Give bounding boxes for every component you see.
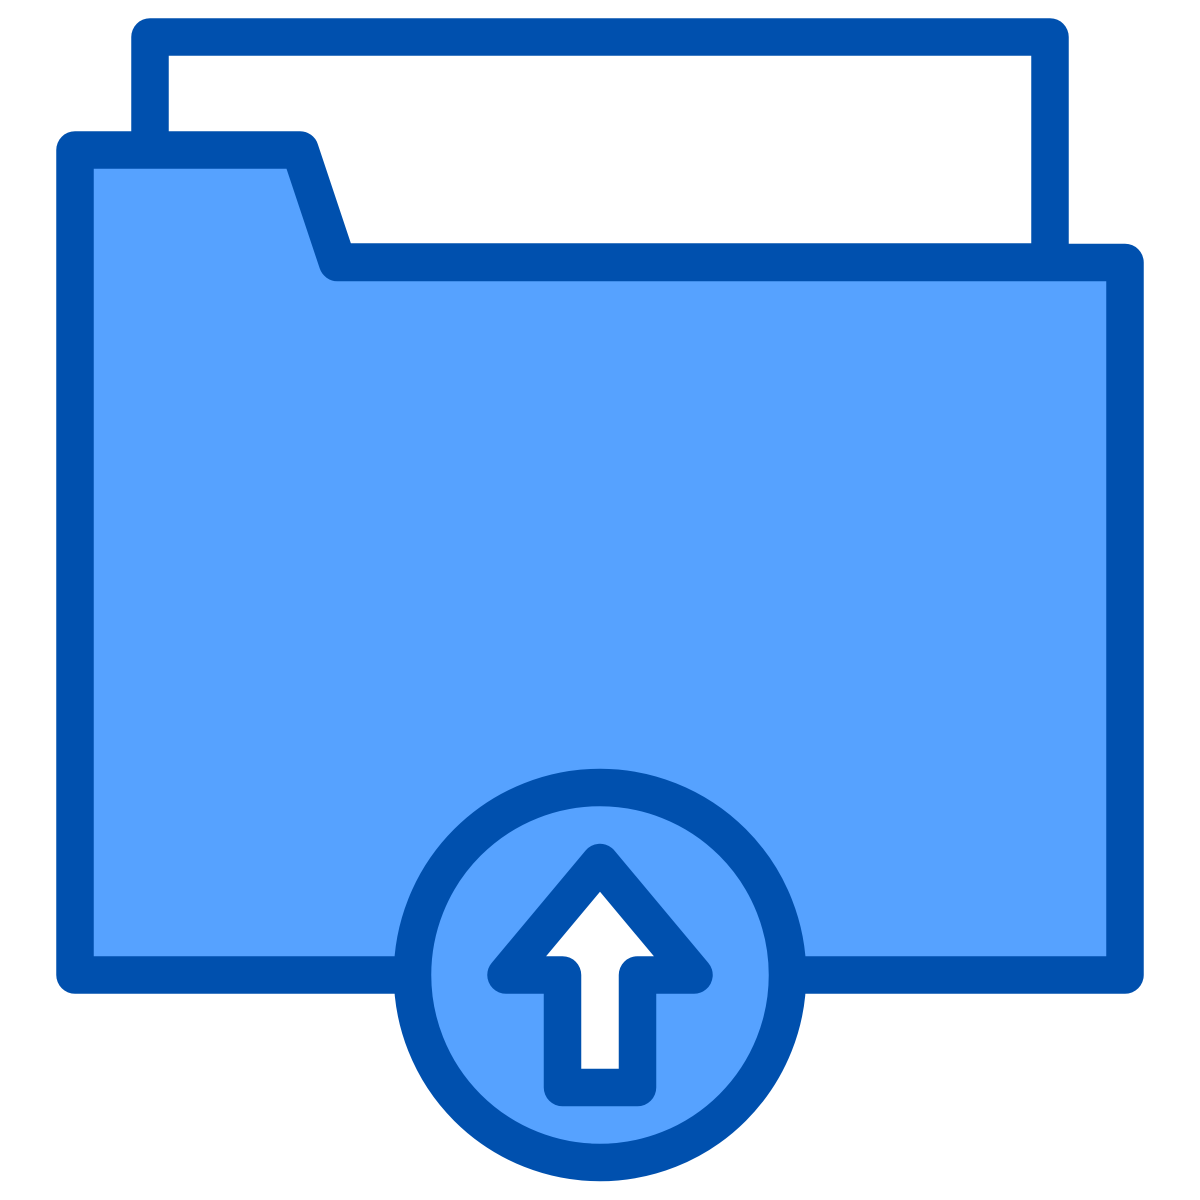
icon: upload arrow [506,862,694,1088]
icon: folder body [75,150,1125,975]
icon: paper sheet behind folder [150,37,1050,262]
icon: upload circle [412,788,788,1162]
